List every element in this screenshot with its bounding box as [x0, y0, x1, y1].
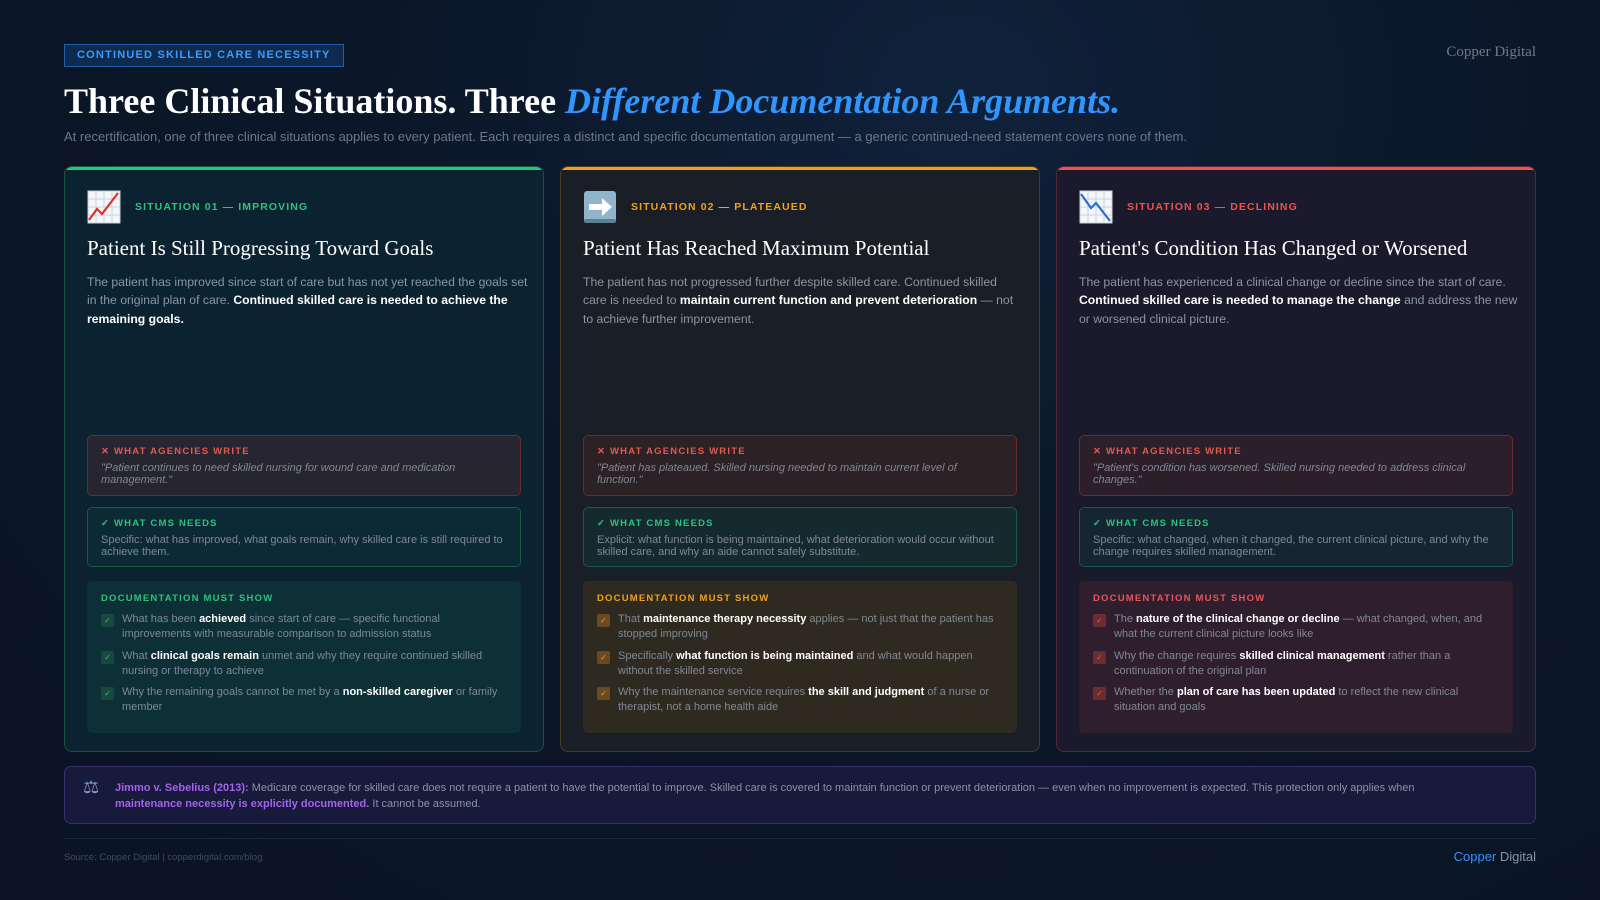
box: what agencies write — [583, 435, 1017, 496]
box: what cms needs: Specific: what has improved, what goals remain, why skilled care is still required to achieve them. — [101, 534, 503, 558]
description: The patient has not progressed further despite skilled care. Continued skilled care is needed to maintain current function and prevent deterioration — not to achieve further improvement. — [583, 275, 1013, 326]
box: documentation must show: What has been achieved since start of care — specific functional improvements with measurable comparison to admission status — [122, 613, 440, 640]
box: documentation must show: ✓ — [1096, 616, 1103, 625]
box: what cms needs — [1079, 507, 1513, 567]
footer brand: Copper Digital — [1454, 849, 1536, 864]
box: what agencies write: ✕ WHAT AGENCIES WRITE — [1093, 446, 1242, 457]
box: what cms needs: ✓ WHAT CMS NEEDS — [101, 518, 218, 529]
panel: situation 03 declining — [1056, 166, 1536, 752]
box: documentation must show: ✓ — [600, 689, 607, 698]
callout: Jimmo v. Sebelius — [64, 766, 1536, 824]
box: what agencies write — [1079, 435, 1513, 496]
panel: situation 02 plateaued — [560, 166, 1040, 752]
box: what cms needs: Explicit: what function is being maintained, what deterioration would occur without skilled care, and why an aide cannot safely substitute. — [597, 534, 994, 558]
tag: category: CONTINUED SKILLED CARE NECESSITY — [77, 49, 331, 61]
box: documentation must show: Why the maintenance service requires the skill and judgment of a nurse or therapist, not a home health aide — [618, 686, 989, 713]
icon: scales: ⚖ — [83, 777, 99, 797]
box: documentation must show: Why the change requires skilled clinical management rather than a continuation of the original plan — [1114, 650, 1450, 677]
box: documentation must show: Why the remaining goals cannot be met by a non-skilled caregiver or family member — [122, 686, 497, 713]
box: documentation must show — [583, 581, 1017, 733]
panel: situation 01 improving — [64, 166, 544, 752]
box: documentation must show: ✓ — [600, 653, 607, 662]
box: what cms needs: Specific: what changed, when it changed, the current clinical picture, and why the change requires skilled management. — [1093, 534, 1489, 558]
box: documentation must show: ✓ — [1096, 653, 1103, 662]
box: documentation must show: ✓ — [1096, 689, 1103, 698]
description: The patient has improved since start of care but has not yet reached the goals set in the original plan of care. Continued skilled care is needed to achieve the remaining goals. — [87, 275, 527, 326]
box: what cms needs: ✓ WHAT CMS NEEDS — [597, 518, 714, 529]
description: The patient has experienced a clinical change or decline since the start of care. Continued skilled care is needed to manage the change and address the new or worsened clinical picture. — [1079, 275, 1517, 326]
heading: Patient Has Reached Maximum Potential — [583, 236, 929, 260]
box: documentation must show: The nature of the clinical change or decline — what changed, when, and what the current clinical picture looks like — [1114, 613, 1482, 640]
icon: chart down — [1080, 190, 1112, 224]
brand top right: Copper Digital — [1446, 44, 1536, 60]
subtitle: At recertification, one of three clinical situations applies to every patient. Each requires a distinct and specific documentation argument — a generic continued-need statement covers none of them. — [64, 129, 1187, 144]
box: documentation must show: ✓ — [104, 689, 111, 698]
box: what agencies write: ✕ WHAT AGENCIES WRITE — [101, 446, 250, 457]
heading: Patient Is Still Progressing Toward Goals — [87, 236, 433, 260]
icon: right arrow — [584, 191, 616, 223]
footer source: Source: Copper Digital | copperdigital.com/blog — [64, 852, 262, 863]
box: what agencies write — [87, 435, 521, 496]
box: what cms needs — [87, 507, 521, 567]
box: what agencies write: ✕ WHAT AGENCIES WRITE — [597, 446, 746, 457]
box: documentation must show: Whether the plan of care has been updated to reflect the new clinical situation and goals — [1114, 686, 1458, 713]
callout: Jimmo v. Sebelius: Jimmo v. Sebelius (2013): Medicare coverage for skilled care does not require a patient to have the potential to improve. Skilled care is covered to maintain function or prevent deterioration — even when no improvement is expected. This protection only applies when maintenance necessity is explicitly documented. It cannot be assumed. — [115, 782, 1415, 810]
icon: chart up — [88, 190, 120, 224]
box: documentation must show: DOCUMENTATION MUST SHOW — [597, 593, 769, 604]
heading: Patient's Condition Has Changed or Worsened — [1079, 236, 1467, 260]
label: SITUATION 01 — IMPROVING — [135, 201, 308, 213]
box: what cms needs — [583, 507, 1017, 567]
box: documentation must show — [87, 581, 521, 733]
box: documentation must show: DOCUMENTATION MUST SHOW — [1093, 593, 1265, 604]
box: documentation must show: ✓ — [600, 616, 607, 625]
box: documentation must show: ✓ — [104, 616, 111, 625]
box: what cms needs: ✓ WHAT CMS NEEDS — [1093, 518, 1210, 529]
box: what agencies write: "Patient has plateaued. Skilled nursing needed to maintain current level of function." — [597, 462, 957, 486]
box: documentation must show: That maintenance therapy necessity applies — not just that the patient has stopped improving — [618, 613, 993, 640]
box: documentation must show: ✓ — [104, 653, 111, 662]
tag: category — [64, 44, 344, 67]
box: documentation must show: DOCUMENTATION MUST SHOW — [101, 593, 273, 604]
box: what agencies write: "Patient's condition has worsened. Skilled nursing needed to address clinical changes." — [1093, 462, 1465, 486]
box: documentation must show — [1079, 581, 1513, 733]
box: documentation must show: Specifically what function is being maintained and what would happen without the skilled service — [618, 650, 973, 677]
label: SITUATION 03 — DECLINING — [1127, 201, 1298, 213]
label: SITUATION 02 — PLATEAUED — [631, 201, 808, 213]
box: what agencies write: "Patient continues to need skilled nursing for wound care and medication management." — [101, 462, 455, 486]
box: documentation must show: What clinical goals remain unmet and why they require continued skilled nursing or therapy to achieve — [122, 650, 482, 677]
title: Three Clinical Situations. Three Different Documentation Arguments. — [64, 81, 1120, 121]
